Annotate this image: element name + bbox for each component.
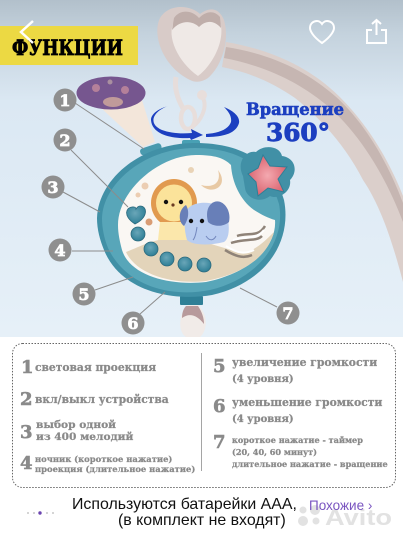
projected image xyxy=(76,76,146,110)
avito watermark xyxy=(298,505,392,530)
bottom pendant xyxy=(180,305,206,337)
stem xyxy=(182,140,200,147)
buttons xyxy=(127,206,211,272)
avito watermark: Avito xyxy=(325,505,392,530)
text: короткое нажатие - таймер xyxy=(232,435,363,445)
battery note: (в комплект не входят) xyxy=(118,512,286,528)
item 3: 3 xyxy=(20,422,33,443)
item 1: 1 xyxy=(21,357,34,378)
number badges xyxy=(42,88,300,334)
similar link: Похожие › xyxy=(309,498,372,513)
text: (4 уровня) xyxy=(232,374,294,385)
number badges: 5 xyxy=(78,285,90,304)
text: (4 уровня) xyxy=(232,414,294,425)
outer body xyxy=(97,143,286,297)
text: выбор одной xyxy=(36,419,116,431)
text: из 400 мелодий xyxy=(36,430,133,442)
text: проекция (длительное нажатие) xyxy=(35,464,195,474)
title banner xyxy=(0,26,138,65)
text: уменьшение громкости xyxy=(232,396,382,409)
callout lines xyxy=(63,103,277,314)
rotation label: Вращение xyxy=(246,100,344,119)
background xyxy=(0,0,403,337)
text: ночник (короткое нажатие) xyxy=(35,454,172,464)
specification panel border xyxy=(12,344,396,488)
battery note: Используются батарейки ААА, xyxy=(72,496,297,513)
rotation label xyxy=(246,100,344,147)
star button xyxy=(241,147,295,200)
wave stripes xyxy=(225,226,265,257)
elephant xyxy=(180,201,229,244)
text: увеличение громкости xyxy=(232,356,377,369)
text: (20, 40, 60 минут) xyxy=(232,447,317,457)
number badges: 3 xyxy=(47,178,59,197)
moon xyxy=(201,170,222,190)
sand xyxy=(126,232,274,282)
lion xyxy=(151,179,197,240)
number badges: 7 xyxy=(282,304,294,323)
number badges: 2 xyxy=(59,131,71,150)
projection beam xyxy=(100,100,155,147)
divider xyxy=(200,353,202,471)
title banner: ФУНКЦИИ xyxy=(12,35,123,60)
icon: share xyxy=(367,20,386,43)
text: световая проекция xyxy=(35,361,156,374)
item 6: 6 xyxy=(213,396,226,417)
rotation arrows xyxy=(151,106,239,140)
arch arm xyxy=(222,42,403,282)
music box xyxy=(97,140,295,305)
text: вкл/выкл устройства xyxy=(35,393,169,406)
item 2: 2 xyxy=(20,389,33,410)
battery note xyxy=(72,496,297,528)
text: длительное нажатие - вращение xyxy=(232,459,388,469)
number badges: 6 xyxy=(127,314,139,333)
icon: heart xyxy=(310,21,334,43)
rotation label: 360° xyxy=(266,118,330,147)
white face xyxy=(118,155,275,283)
number badges: 4 xyxy=(54,241,66,260)
button projection xyxy=(139,142,162,156)
heart hanger xyxy=(157,7,226,129)
item 7: 7 xyxy=(213,432,226,453)
item 5: 5 xyxy=(213,356,226,377)
item 4: 4 xyxy=(20,453,33,474)
carousel dots xyxy=(27,511,54,515)
number badges: 1 xyxy=(59,91,71,110)
icon: back arrow xyxy=(21,21,33,43)
